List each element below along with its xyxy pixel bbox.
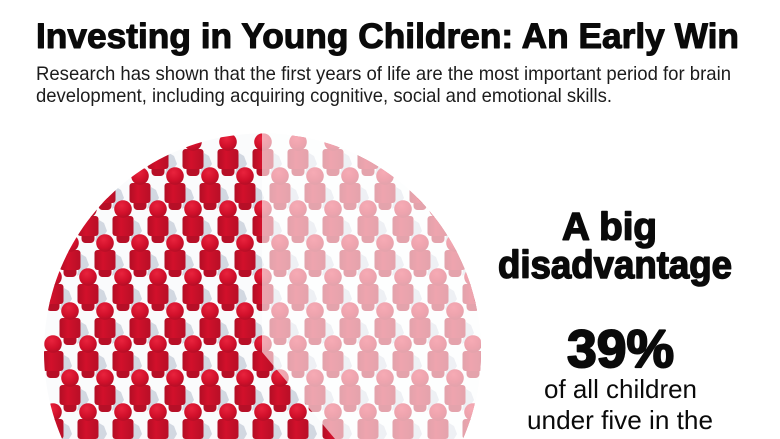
- statistic description: [527, 374, 713, 435]
- heading: A big disadvantage: A big: [562, 206, 657, 249]
- heading: A big disadvantage: [498, 206, 732, 287]
- heading: A big disadvantage: disadvantage: [498, 244, 732, 287]
- pie chart of human figures: 39% highlighted: [42, 130, 492, 439]
- statistic description: under five in the: [527, 405, 713, 435]
- statistic description: of all children: [544, 374, 697, 404]
- intro text: Research has shown that the first years of life are the most important period for brain: [36, 63, 731, 85]
- intro text: [36, 63, 731, 107]
- title: Investing in Young Children: An Early Win: [36, 17, 739, 56]
- statistic: 39%: 39%: [567, 320, 674, 379]
- intro text: development, including acquiring cognitive, social and emotional skills.: [36, 85, 612, 107]
